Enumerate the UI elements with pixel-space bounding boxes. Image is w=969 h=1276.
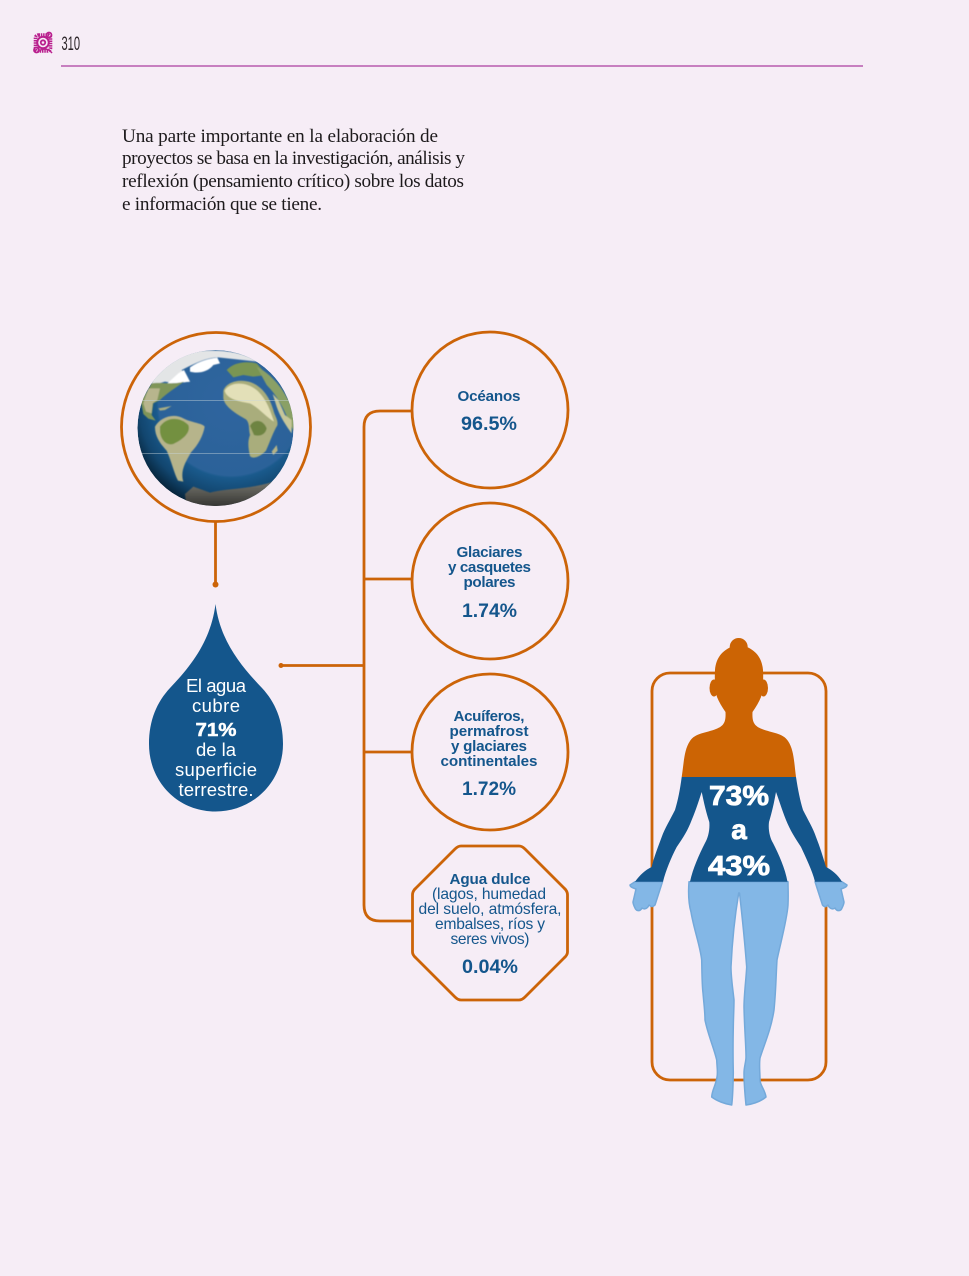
- circle: aquifers: continentales: [440, 753, 538, 770]
- madagascar: [272, 445, 278, 455]
- circle: glaciers: polares: [464, 574, 516, 591]
- connector: globe to drop: [212, 522, 218, 588]
- north america: [141, 382, 184, 421]
- antarctica: [184, 482, 272, 506]
- water drop callout: 71%: [196, 719, 236, 740]
- intro text: proyectos se basa en la investigación, análisis y: [122, 148, 465, 169]
- connector bracket: [278, 411, 412, 921]
- octagon: fresh water: (lagos, humedad: [432, 886, 546, 903]
- circle: glaciers: y casquetes: [448, 559, 531, 576]
- water drop callout: superficie: [175, 759, 257, 780]
- circle: aquifers: 1.72%: [462, 778, 516, 800]
- intro text: reflexión (pensamiento crítico) sobre los datos: [122, 171, 464, 192]
- page header: [34, 32, 863, 66]
- octagon: fresh water: 0.04%: [462, 956, 518, 978]
- water drop callout: El agua: [186, 675, 247, 696]
- body frame: [652, 673, 826, 1080]
- body label: 43%: [708, 850, 770, 881]
- circle: oceans: [412, 332, 568, 488]
- circle: aquifers: [412, 674, 568, 830]
- latitude lines: [140, 400, 292, 453]
- water drop callout: [149, 604, 283, 812]
- water drop callout: cubre: [192, 695, 240, 716]
- circle: aquifers: y glaciares: [451, 738, 527, 755]
- arctic ice: [151, 351, 258, 385]
- body label: 73%: [709, 780, 769, 811]
- circle: glaciers: Glaciares: [456, 544, 522, 561]
- body label: a: [731, 814, 747, 845]
- human body figure: [630, 638, 847, 1105]
- circle: aquifers: permafrost: [450, 723, 528, 740]
- circle: oceans: Océanos: [458, 388, 520, 405]
- octagon: fresh water: del suelo, atmósfera,: [418, 901, 562, 918]
- circle: glaciers: 1.74%: [462, 600, 517, 622]
- circle: aquifers: Acuíferos,: [454, 708, 524, 725]
- octagon: fresh water: embalses, ríos y: [435, 916, 545, 933]
- octagon: fresh water: [412, 846, 568, 1000]
- body: head and shoulders: [682, 638, 796, 777]
- water drop callout: terrestre.: [178, 779, 254, 800]
- europe: [227, 362, 267, 377]
- globe illustration: [138, 350, 294, 510]
- globe in ring: [122, 332, 310, 522]
- intro text: e información que se tiene.: [122, 194, 322, 215]
- body: hands and legs: [630, 882, 847, 1105]
- ring: [122, 332, 310, 522]
- intro text: Una parte importante en la elaboración de: [122, 126, 438, 147]
- body: torso and arms: [635, 777, 842, 882]
- circle: oceans: 96.5%: [461, 413, 517, 435]
- body label: [708, 780, 770, 881]
- octagon: fresh water: Agua dulce: [450, 871, 530, 888]
- water drop callout: de la: [196, 739, 237, 760]
- circle: glaciers: [412, 503, 568, 659]
- africa: [223, 381, 278, 458]
- south america: [155, 416, 205, 482]
- octagon: fresh water: seres vivos): [450, 931, 530, 948]
- icon: decorative swirl: [34, 32, 52, 53]
- page number: 310: [62, 33, 80, 55]
